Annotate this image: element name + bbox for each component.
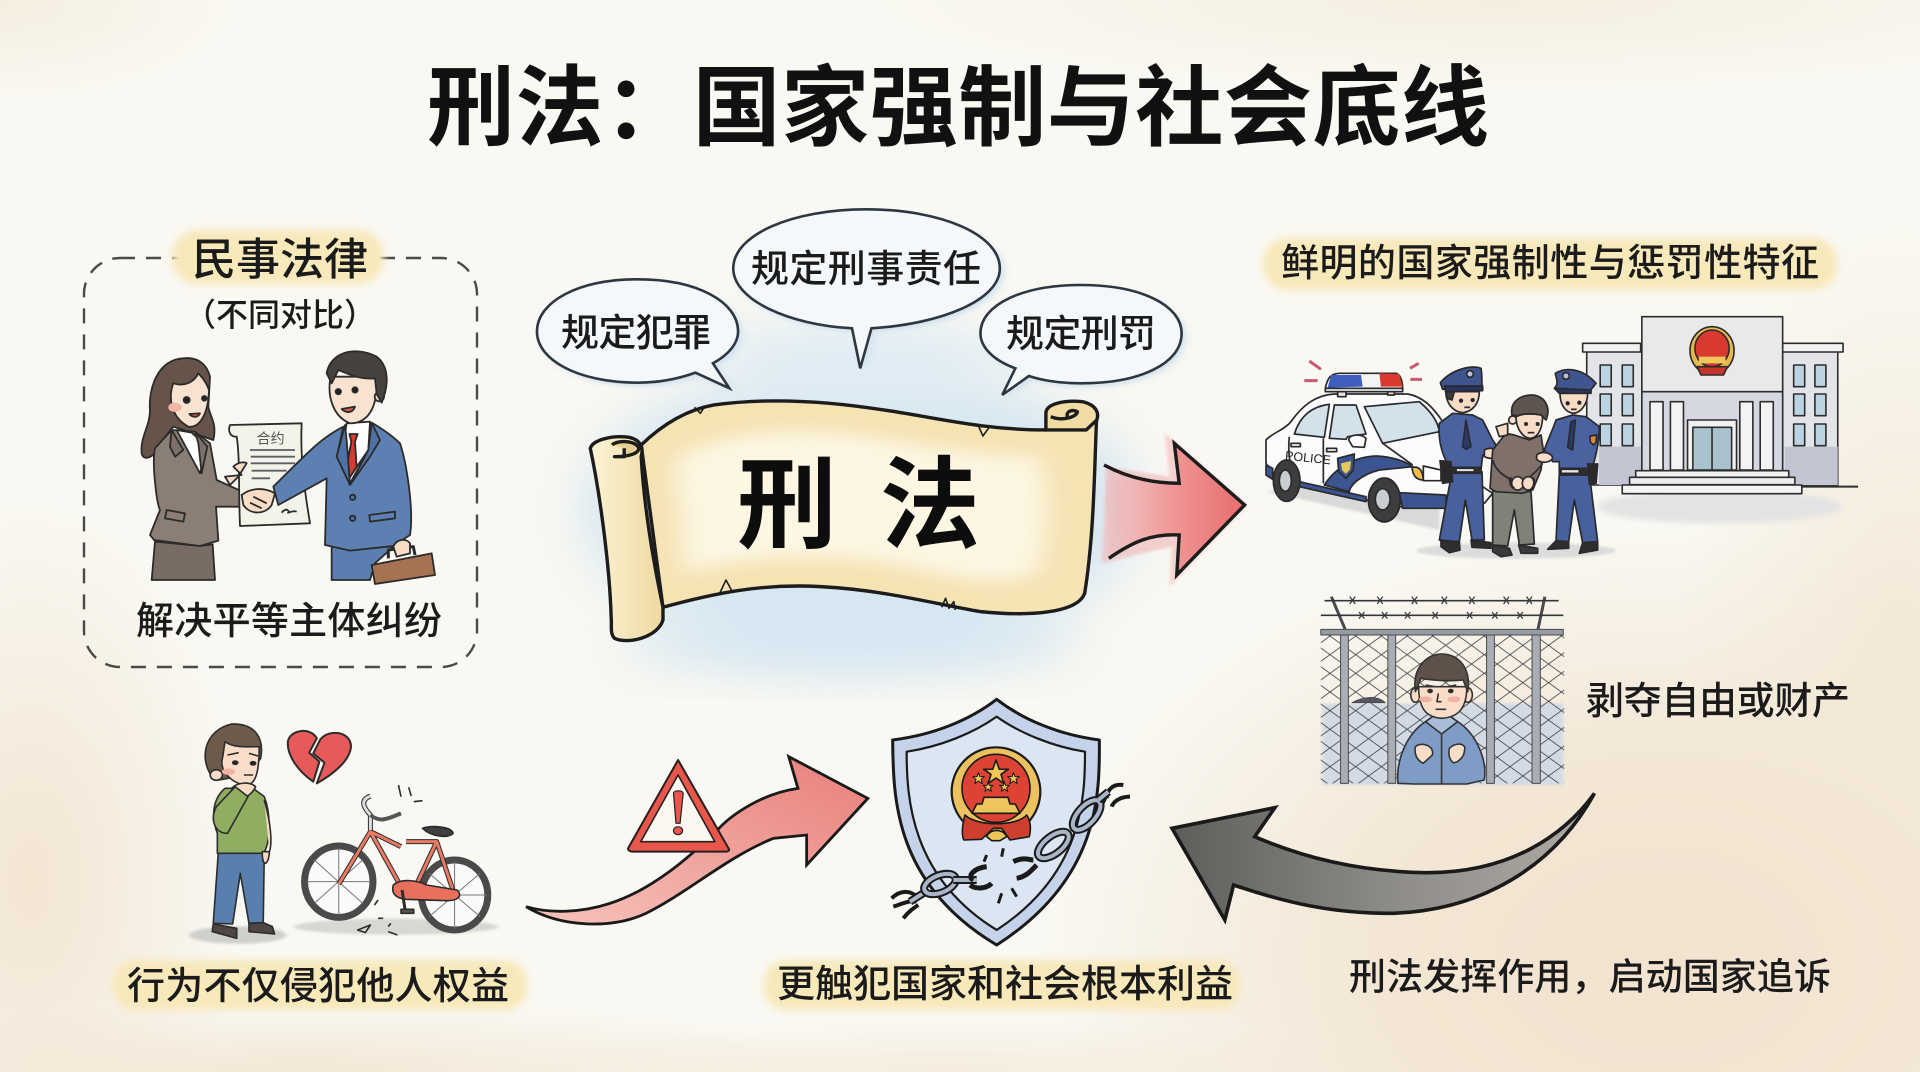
blue watercolor wash behind scroll [580, 325, 1140, 670]
handshake [242, 489, 275, 512]
bubble: punishment: 规定刑罚 [1006, 314, 1156, 356]
heading: coercive and punitive: 鲜明的国家强制性与惩罚性特征 [1281, 243, 1819, 285]
panel: shield of state interest [764, 699, 1240, 1010]
civil law heading: 民事法律 [192, 236, 368, 284]
right officer [1537, 370, 1599, 553]
caption: equal-party disputes: 解决平等主体纠纷 [136, 601, 442, 643]
caption: state and social interests: 更触犯国家和社会根本利益 [777, 964, 1233, 1006]
broken heart [288, 731, 351, 783]
bicycle [305, 785, 488, 935]
arrow: gray, law to state interest [1172, 793, 1594, 920]
panel: state coercion and punishment [1263, 238, 1858, 559]
bubble: crimes: 规定犯罪 [561, 313, 711, 355]
caption: harm to others' rights: 行为不仅侵犯他人权益 [127, 966, 509, 1008]
court building [1583, 317, 1858, 523]
icon: shield with national emblem and broken chain [892, 699, 1130, 945]
subheading: contrast: （不同对比） [184, 297, 376, 333]
scroll title characters [737, 450, 980, 562]
illustration: sad person and broken bike [189, 724, 498, 944]
bubble: criminal liability: 规定刑事责任 [751, 249, 981, 291]
broken chain links [892, 785, 1130, 918]
illustration: arrest scene [1266, 361, 1616, 559]
bubble: criminal liability [733, 209, 1004, 372]
dashed frame [84, 258, 477, 667]
bubble: crimes [537, 279, 742, 392]
panel: harmed individual [113, 724, 527, 1010]
illustration: prisoner behind fence [1321, 597, 1564, 785]
scroll: criminal law [590, 401, 1098, 641]
prisoner in handcuffs [1490, 395, 1548, 557]
man in blue suit [332, 547, 393, 580]
arrow: red rising with warning sign [526, 757, 868, 924]
caption: deprivation of liberty: 剥夺自由或财产 [1586, 681, 1850, 723]
panel: civil law comparison [84, 230, 477, 667]
scroll title characters: 刑 [737, 450, 837, 562]
left officer [1439, 367, 1499, 553]
title: 刑法：国家强制与社会底线 [427, 58, 1489, 158]
contract document: 合约 [257, 430, 285, 446]
arrow: red, scroll to enforcement [1102, 433, 1247, 587]
prisoner [1398, 654, 1485, 784]
scroll title characters: 法 [880, 450, 980, 562]
emblem [952, 747, 1040, 841]
bubble: punishment [980, 285, 1185, 398]
car label: police: POLICE [1284, 449, 1332, 467]
briefcase [372, 540, 435, 584]
illustration: handshake over contract [141, 351, 435, 584]
panel: loss of liberty or property [1321, 597, 1850, 785]
icon: warning triangle [628, 760, 729, 852]
person [205, 724, 274, 938]
contract document [229, 423, 310, 526]
speech bubbles [537, 209, 1185, 398]
police car [1266, 361, 1493, 522]
caption: state prosecution: 刑法发挥作用，启动国家追诉 [1349, 956, 1831, 998]
